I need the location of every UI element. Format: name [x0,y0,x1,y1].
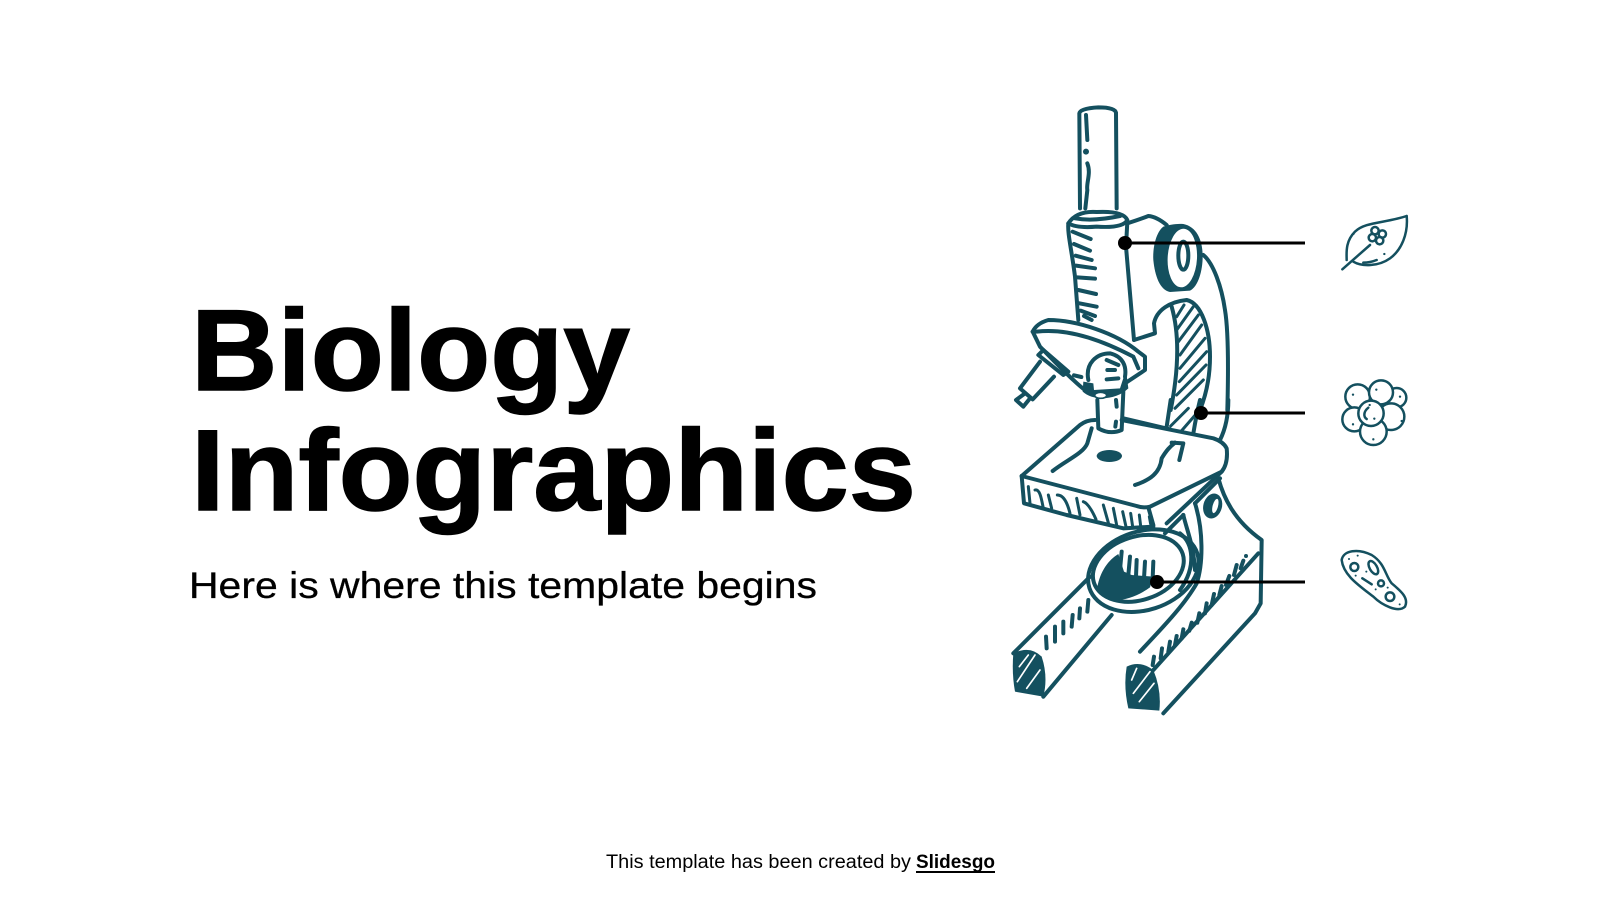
icon: leaf [1342,216,1407,269]
footer credit: Slidesgo [916,852,995,873]
icon: paramecium [1342,551,1406,609]
connector: arm to cell cluster icon [1194,406,1305,420]
subtitle: Here is where this template begins [189,565,817,606]
footer credit: This template has been created by [606,852,912,873]
microscope base pillar and right leg [1140,478,1262,713]
icon: cell cluster [1342,380,1406,445]
connector: eyepiece to leaf icon [1118,236,1305,250]
microscope nosepiece and objectives [1016,320,1170,432]
title: Infographics [191,407,916,535]
microscope stage, mirror and left leg [1013,400,1228,697]
title: Biology [191,287,630,415]
microscope tube and arm [1068,107,1228,410]
title [191,287,916,535]
microscope right foot [1125,664,1160,711]
microscope illustration [1013,107,1262,713]
connector: mirror to organism icon [1150,575,1305,589]
